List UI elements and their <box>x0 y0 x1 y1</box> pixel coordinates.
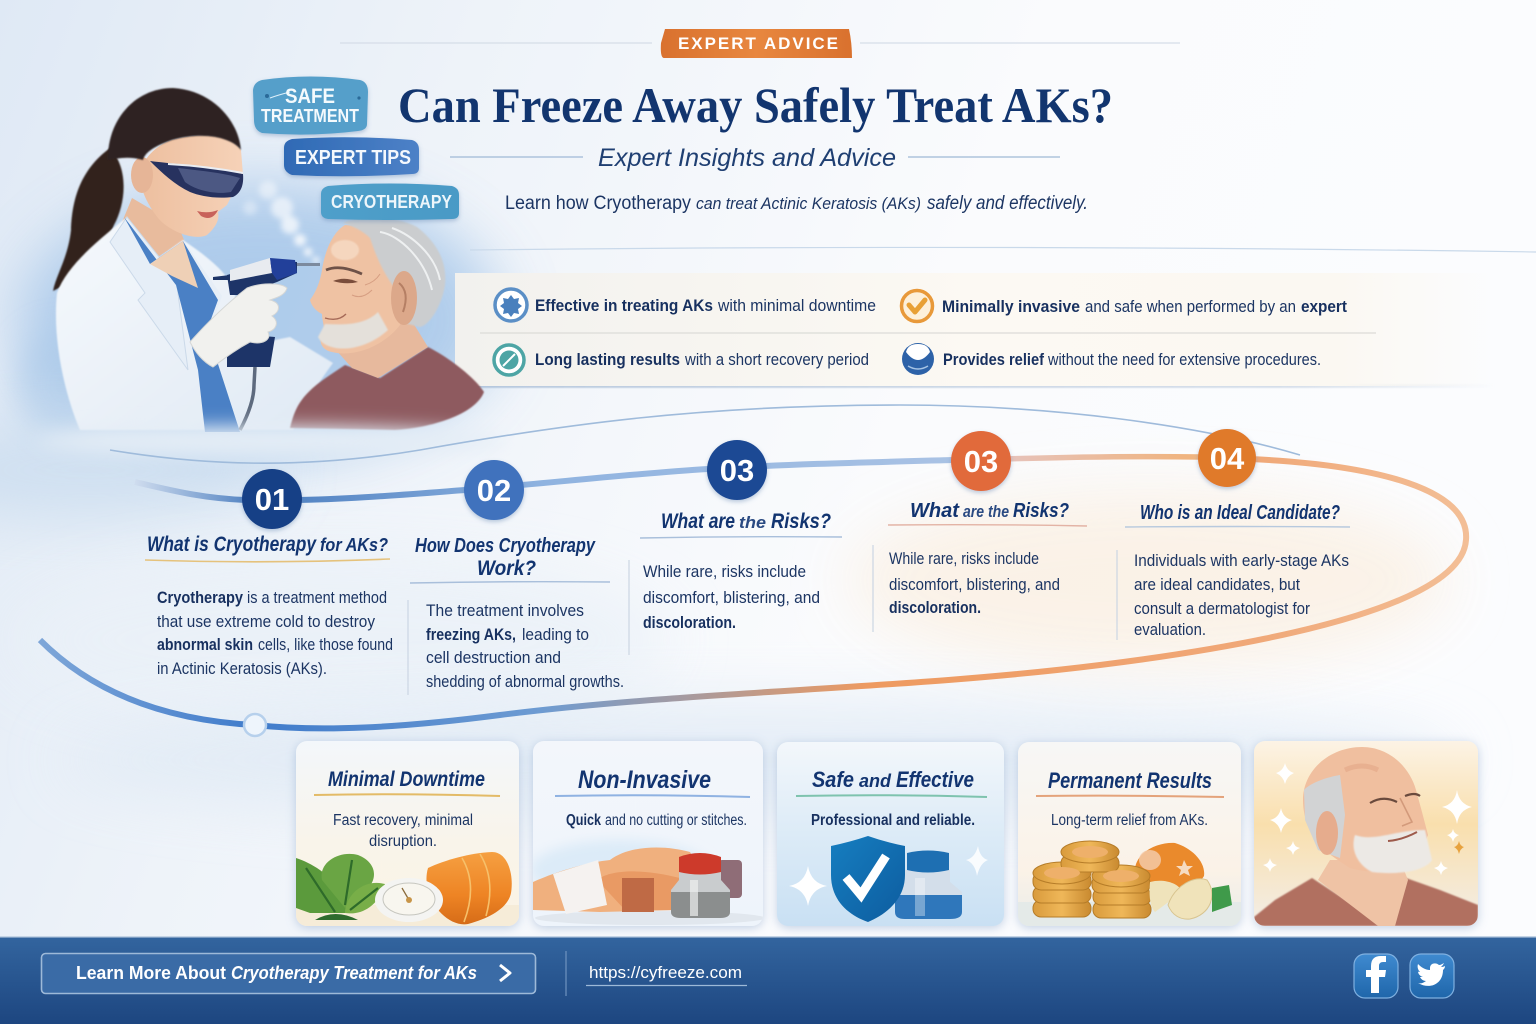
shield <box>831 836 905 922</box>
clinician coat <box>56 217 333 430</box>
step 4: ideal candidate: are ideal candidates, but <box>1134 576 1300 594</box>
step 3 repeat: what are the risks: discomfort, blistering, and <box>889 576 1060 594</box>
step 4: ideal candidate: evaluation. <box>1134 621 1206 639</box>
clinician ponytail <box>53 148 124 291</box>
card text: Quick <box>566 812 601 829</box>
card heading: Permanent Results <box>1048 768 1212 793</box>
title: Can Freeze Away Safely Treat AKs? <box>398 77 1113 133</box>
benefit: effective: with minimal downtime <box>717 296 876 315</box>
card heading <box>812 767 974 792</box>
intro sentence: can treat Actinic Keratosis (AKs) <box>696 194 921 213</box>
step 1: what is cryotherapy: that use extreme cold to destroy <box>157 613 376 631</box>
icon: twitter <box>1410 954 1454 998</box>
jar <box>671 872 730 892</box>
patient neck <box>336 318 428 378</box>
card heading: Non-Invasive <box>578 766 711 794</box>
clinician scrubs <box>124 217 240 432</box>
step 1: what is cryotherapy: for AKs? <box>320 535 388 555</box>
step 1: what is cryotherapy <box>145 533 393 678</box>
step 4: ideal candidate: Who is an Ideal Candidate? <box>1140 502 1340 524</box>
call to action button: Learn More About <box>76 963 226 983</box>
step 1: what is cryotherapy: Cryotherapy <box>157 589 244 607</box>
step badge 02: 02 <box>477 473 511 508</box>
card heading: Effective <box>896 767 974 792</box>
arm <box>533 847 705 912</box>
clinician neck <box>122 198 184 262</box>
step 2: how does cryotherapy work: leading to <box>522 626 589 644</box>
gold coins <box>1033 841 1151 918</box>
card text: disruption. <box>369 833 437 850</box>
step 3: what are the risks: discoloration. <box>643 614 736 632</box>
step 3 repeat: what are the risks: What <box>910 500 960 522</box>
step 1: what is cryotherapy: What is Cryotherapy <box>147 533 317 556</box>
step 2: how does cryotherapy work: Work? <box>477 557 536 580</box>
call to action button <box>42 954 536 994</box>
card: non-invasive <box>530 741 765 926</box>
clinician goggles <box>150 161 243 198</box>
step 2: how does cryotherapy work: cell destruction and <box>426 649 561 667</box>
step badge 03 <box>707 440 767 500</box>
tag: safe treatment: TREATMENT <box>261 106 359 126</box>
white beard <box>1354 830 1432 873</box>
benefit: long lasting <box>494 345 869 375</box>
tag: expert tips: EXPERT TIPS <box>295 147 411 169</box>
step 2: how does cryotherapy work <box>408 535 624 695</box>
card heading: Safe <box>812 767 854 792</box>
intro sentence: safely and effectively. <box>927 193 1088 214</box>
step 3: what are the risks <box>629 510 842 655</box>
card text <box>566 812 747 829</box>
step 1: what is cryotherapy: in Actinic Keratosis (AKs). <box>157 660 327 678</box>
step 1: what is cryotherapy: is a treatment method <box>247 589 387 607</box>
cryo device <box>213 258 320 430</box>
card text: Fast recovery, minimal <box>333 812 473 829</box>
clinician head <box>140 135 243 237</box>
step 4: ideal candidate <box>1117 502 1350 640</box>
footer bar <box>0 936 1536 1024</box>
step 2: how does cryotherapy work: The treatment involves <box>426 602 584 620</box>
back jar <box>721 860 742 898</box>
benefit: minimally invasive: and safe when performed by an <box>1085 297 1296 316</box>
step 3: what are the risks: While rare, risks include <box>643 563 806 581</box>
benefit: long lasting: with a short recovery period <box>684 350 869 369</box>
benefit: provides relief: Provides relief <box>943 350 1044 369</box>
head <box>1303 747 1428 872</box>
step 3: what are the risks: the <box>739 513 766 532</box>
illustration bottom fade <box>35 426 505 456</box>
benefit: minimally invasive: Minimally invasive <box>942 297 1080 316</box>
step badge 03 orange <box>951 431 1011 491</box>
leaf <box>1212 885 1232 912</box>
patient hair <box>343 217 445 327</box>
call to action button: Cryotherapy Treatment for AKs <box>231 963 477 983</box>
blue jar <box>895 850 962 919</box>
card text: Professional and reliable. <box>811 812 975 829</box>
sparkles <box>1263 763 1472 875</box>
step 3 repeat: what are the risks: Risks? <box>1013 500 1069 522</box>
benefit: provides relief <box>902 343 1321 375</box>
card text: and no cutting or stitches. <box>605 812 747 829</box>
step 4: ideal candidate: consult a dermatologist for <box>1134 600 1310 618</box>
orange cylinder <box>426 852 512 924</box>
step 3: what are the risks: What are <box>661 510 735 533</box>
step 4: ideal candidate: Individuals with early-stage AKs <box>1134 552 1349 570</box>
card text: Long-term relief from AKs. <box>1051 812 1208 829</box>
benefit: effective <box>495 289 876 321</box>
subtitle: Expert Insights and Advice <box>598 144 896 172</box>
step 2: how does cryotherapy work: shedding of abnormal growths. <box>426 673 624 691</box>
benefit: long lasting: Long lasting results <box>535 350 680 369</box>
neck <box>1318 860 1408 926</box>
tag: cryotherapy: CRYOTHERAPY <box>331 192 452 212</box>
intro sentence <box>505 193 1088 214</box>
sparkle <box>966 846 988 876</box>
ear <box>1316 811 1338 855</box>
card: minimal downtime <box>296 741 519 926</box>
step badge 03 orange: 03 <box>964 444 998 479</box>
card: permanent results <box>1018 742 1241 926</box>
card: smiling patient portrait <box>1254 741 1478 926</box>
card text <box>333 812 473 850</box>
sparkle <box>789 866 827 906</box>
orange fruit <box>1135 843 1204 890</box>
smile and eyes <box>1388 832 1417 841</box>
tag: safe treatment <box>253 76 368 135</box>
step 3 repeat: what are the risks <box>873 500 1087 632</box>
panel: key benefits <box>455 273 1495 388</box>
card: safe and effective <box>777 742 1004 926</box>
table surface <box>296 905 519 926</box>
benefit: minimally invasive <box>902 290 1347 322</box>
step badge 04 <box>1198 429 1256 487</box>
tag: safe treatment: SAFE <box>285 85 335 108</box>
cream pieces <box>1150 881 1182 912</box>
green leaves <box>296 854 385 920</box>
illustration: clinician treating patient <box>35 88 505 456</box>
card heading: Minimal Downtime <box>328 768 485 791</box>
step badge 04: 04 <box>1210 441 1245 476</box>
intro sentence: Learn how Cryotherapy <box>505 193 691 214</box>
gloved hand <box>190 284 287 367</box>
bandage <box>553 860 607 914</box>
patient face <box>310 225 405 353</box>
benefit: provides relief: without the need for extensive procedures. <box>1047 350 1321 369</box>
clinician hair <box>108 88 241 160</box>
patient shirt <box>290 347 484 430</box>
shirt <box>1254 878 1478 926</box>
step badge 02 <box>464 460 524 520</box>
tag: expert tips <box>284 137 419 176</box>
badge: expert advice: EXPERT ADVICE <box>678 34 838 53</box>
step 2: how does cryotherapy work: How Does Cryotherapy <box>415 535 596 557</box>
step 3 repeat: what are the risks: While rare, risks include <box>889 550 1039 568</box>
step badge 01: 01 <box>255 482 289 517</box>
step 1: what is cryotherapy: abnormal skin <box>157 636 253 654</box>
benefit: minimally invasive: expert <box>1301 297 1347 316</box>
website link: https://cyfreeze.com <box>589 963 742 982</box>
tag: cryotherapy <box>321 184 459 220</box>
icon: facebook <box>1354 954 1398 998</box>
cryo spray <box>243 181 319 263</box>
card heading: and <box>859 771 892 791</box>
timeline ribbon <box>40 405 1466 728</box>
step badge 01 <box>242 469 302 529</box>
step 3: what are the risks: Risks? <box>771 510 831 533</box>
step 2: how does cryotherapy work: freezing AKs, <box>426 626 516 644</box>
white gauge <box>375 878 443 922</box>
step 3 repeat: what are the risks: are the <box>963 502 1009 521</box>
step 3: what are the risks: discomfort, blistering, and <box>643 589 820 607</box>
jar lid <box>679 853 721 874</box>
grey hair <box>1304 775 1345 858</box>
step 3 repeat: what are the risks: discoloration. <box>889 599 981 617</box>
timeline node <box>244 714 266 736</box>
benefit: effective: Effective in treating AKs <box>535 296 713 315</box>
step badge 03: 03 <box>720 453 754 488</box>
step 1: what is cryotherapy: cells, like those found <box>258 636 393 654</box>
badge: expert advice <box>340 29 1180 58</box>
